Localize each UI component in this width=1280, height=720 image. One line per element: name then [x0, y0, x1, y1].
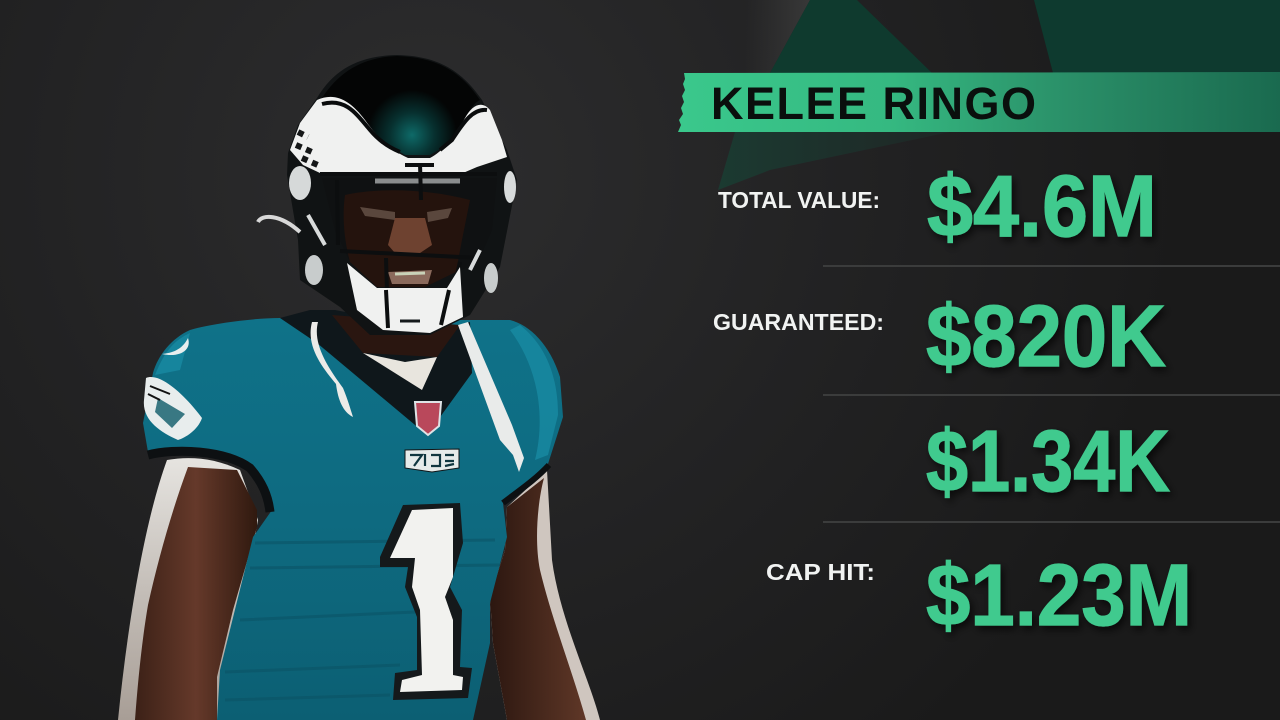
- stat: guaranteed: $820K: [926, 288, 1166, 385]
- facemask top bar: [320, 172, 497, 176]
- jersey highlights: [510, 325, 558, 460]
- stat: cap hit: $1.23M: [926, 547, 1192, 644]
- sleeve logo: [144, 377, 202, 440]
- collar: [280, 310, 472, 435]
- stat: guaranteed: [713, 288, 1166, 385]
- stat: third value: $1.34K: [926, 413, 1170, 510]
- right strap: [458, 322, 524, 472]
- helmet shell: [287, 55, 517, 335]
- jersey: [143, 310, 563, 720]
- facemask bars: [337, 163, 480, 325]
- neck: [332, 315, 460, 357]
- stat: cap hit: [766, 547, 1192, 644]
- jersey waist band and wrinkles: [225, 540, 500, 700]
- stat: cap hit: CAP HIT:: [766, 559, 875, 585]
- player illustration: [118, 55, 600, 720]
- NFL shield: [415, 402, 441, 435]
- left strap: [311, 322, 353, 417]
- helmet dome: [322, 56, 480, 155]
- stat: guaranteed: GUARANTEED:: [713, 309, 884, 335]
- helmet side details: [289, 166, 311, 200]
- stat: total value: [718, 158, 1157, 255]
- stat: total value: $4.6M: [927, 158, 1157, 255]
- undershirt: [363, 353, 437, 390]
- left arm: [118, 458, 258, 720]
- visor: [322, 178, 497, 272]
- white eagle wings: [290, 97, 507, 173]
- visor tint band: [375, 178, 460, 184]
- chest wordmark: [405, 449, 459, 472]
- right arm: [490, 470, 600, 720]
- face: [344, 190, 470, 287]
- banner: player name: KELEE RINGO: [711, 78, 1036, 129]
- helmet: [258, 55, 517, 335]
- jersey number 1: [380, 503, 472, 700]
- helmet side hook: [258, 217, 300, 232]
- chin guard: [347, 263, 463, 333]
- stat: total value: TOTAL VALUE:: [718, 187, 880, 213]
- banner: player name: [678, 72, 1280, 132]
- shoulder swoosh: [162, 338, 189, 355]
